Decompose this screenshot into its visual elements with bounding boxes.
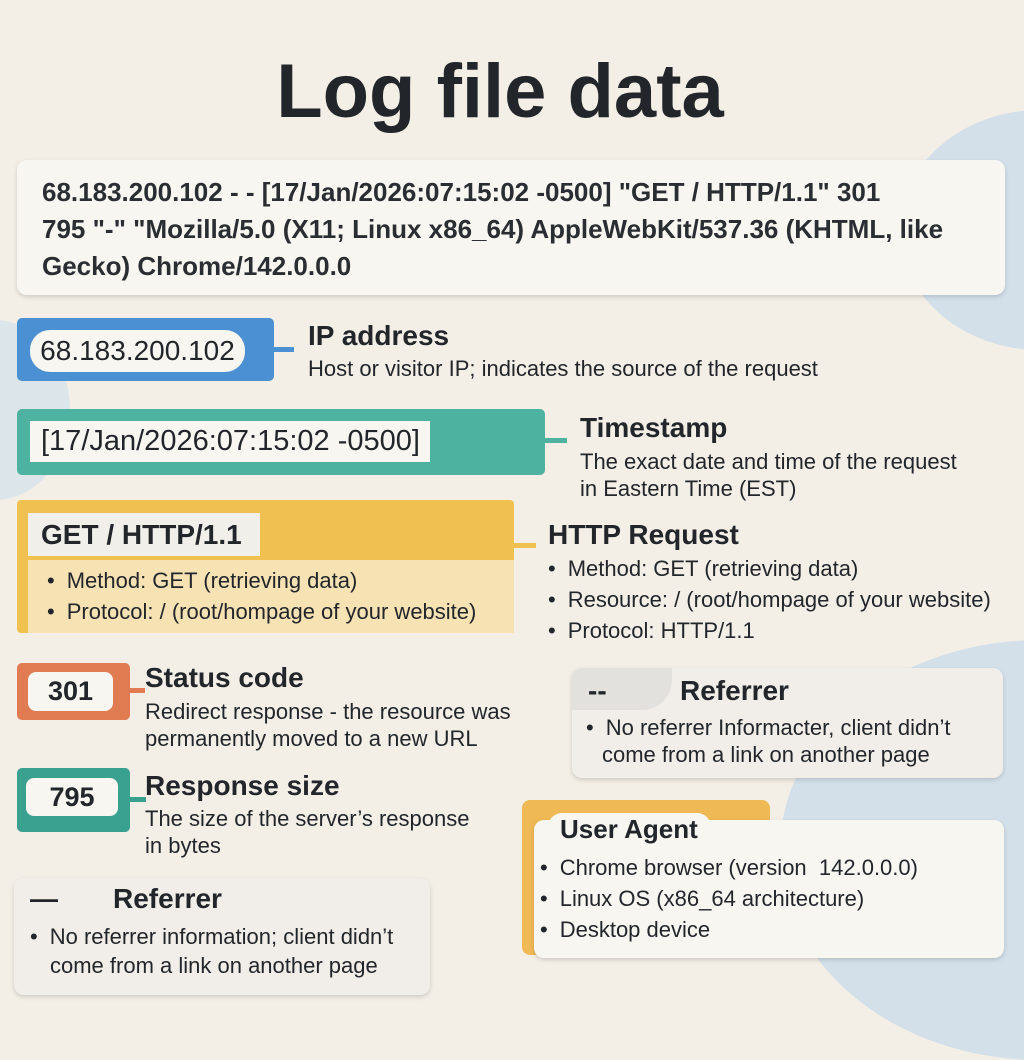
- panel: Referrer (right): [572, 668, 1003, 778]
- panel: User Agent: Linux OS (x86_64 architecture): [560, 886, 864, 911]
- panel: Status code: Redirect response - the resource was: [145, 699, 511, 724]
- panel: Timestamp: in Eastern Time (EST): [580, 476, 796, 501]
- panel: Referrer (left): Referrer: [113, 883, 222, 914]
- panel: IP address: IP address: [308, 320, 449, 351]
- panel: Timestamp: [17, 409, 957, 501]
- panel: Referrer (left): come from a link on another page: [50, 953, 378, 978]
- panel: Timestamp: [17/Jan/2026:07:15:02 -0500]: [41, 425, 420, 457]
- panel: Timestamp: The exact date and time of the request: [580, 449, 957, 474]
- panel: Response size: 795: [49, 782, 95, 812]
- panel: Referrer (right): --: [588, 675, 607, 706]
- panel: HTTP Request: Resource: / (root/hompage of your website): [568, 587, 991, 612]
- panel: User Agent: [522, 800, 1006, 962]
- panel: User Agent: User Agent: [560, 814, 698, 844]
- panel: Response size: [17, 768, 469, 858]
- panel: Referrer (left): No referrer information; client didn’t: [50, 924, 393, 949]
- panel: HTTP Request: Method: GET (retrieving data): [67, 568, 357, 593]
- panel: HTTP Request: GET / HTTP/1.1: [41, 519, 242, 550]
- title: Log file data: [276, 49, 724, 134]
- log line box: 68.183.200.102 - - [17/Jan/2026:07:15:02 -0500] "GET / HTTP/1.1" 301: [42, 177, 880, 207]
- panel: IP address: [17, 318, 818, 381]
- panel: Timestamp: Timestamp: [580, 412, 727, 443]
- panel: Response size: in bytes: [145, 833, 221, 858]
- panel: Response size: Response size: [145, 770, 340, 801]
- panel: Referrer (left): —: [30, 883, 58, 914]
- panel: HTTP Request: Protocol: / (root/hompage of your website): [67, 599, 476, 624]
- panel: IP address: 68.183.200.102: [40, 335, 235, 366]
- panel: HTTP Request: HTTP Request: [548, 519, 739, 550]
- panel: Response size: The size of the server’s response: [145, 806, 469, 831]
- panel: User Agent: Desktop device: [560, 917, 710, 942]
- panel: Referrer (right): No referrer Informacter, client didn’t: [606, 715, 951, 740]
- panel: HTTP Request: Protocol: HTTP/1.1: [568, 618, 755, 643]
- panel: Status code: Status code: [145, 662, 304, 693]
- log line box: 795 "-" "Mozilla/5.0 (X11; Linux x86_64) AppleWebKit/537.36 (KHTML, like: [42, 214, 943, 244]
- panel: Status code: 301: [48, 676, 93, 706]
- panel: Referrer (right): come from a link on another page: [602, 742, 930, 767]
- log line box: Gecko) Chrome/142.0.0.0: [42, 251, 351, 281]
- panel: Status code: permanently moved to a new URL: [145, 726, 478, 751]
- panel: Referrer (left): [14, 878, 430, 995]
- panel: User Agent: Chrome browser (version 142.0.0.0): [560, 855, 918, 880]
- panel: HTTP Request: Method: GET (retrieving data): [568, 556, 858, 581]
- panel: IP address: Host or visitor IP; indicates the source of the request: [308, 356, 818, 381]
- panel: HTTP Request: [17, 500, 991, 643]
- log line box: [17, 160, 1005, 295]
- panel: Status code: [17, 662, 511, 751]
- panel: Referrer (right): Referrer: [680, 675, 789, 706]
